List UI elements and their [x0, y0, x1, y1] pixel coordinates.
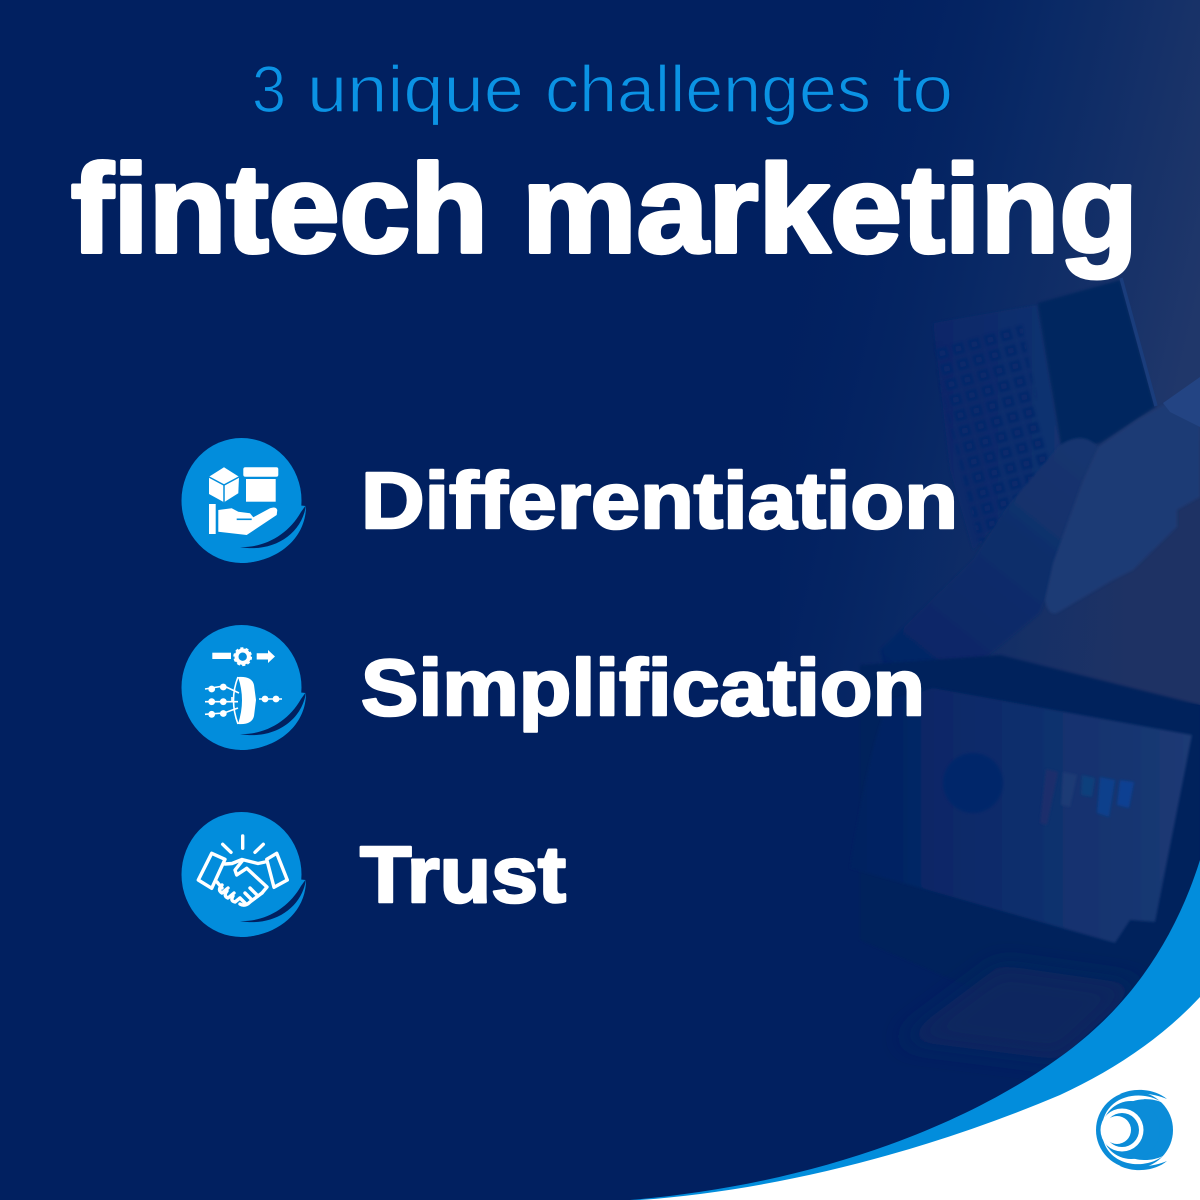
item: Differentiation — [182, 438, 958, 563]
title line: 3 unique challenges to: challenges — [545, 52, 871, 126]
heading: fintech marketing: fintech — [71, 140, 488, 279]
title line: 3 unique challenges to: to — [892, 52, 953, 126]
shirt cuff — [1163, 377, 1200, 427]
laptop base — [933, 305, 1062, 550]
handshake right hand — [1045, 383, 1200, 613]
heading: fintech marketing — [71, 140, 1138, 279]
logo — [1096, 1090, 1173, 1170]
handshake left arm — [880, 438, 1098, 700]
background photo: laptop, handshake and report — [780, 0, 1200, 1060]
item: Trust — [182, 812, 566, 937]
report bars — [1040, 769, 1134, 825]
laptop screen — [1038, 280, 1155, 450]
report paper — [850, 688, 1192, 943]
heading: fintech marketing: marketing — [522, 140, 1138, 279]
blue curve — [630, 860, 1200, 1200]
white corner — [640, 997, 1200, 1200]
label: Differentiation: Differentiation — [361, 456, 958, 545]
icon: process gear and filter wheel — [182, 625, 306, 750]
title line: 3 unique challenges to: 3 — [252, 52, 286, 126]
report pie — [943, 753, 1003, 813]
label: Trust: Trust — [360, 830, 566, 919]
title line: 3 unique challenges to: unique — [307, 52, 524, 126]
icon: open hand holding boxes — [182, 438, 306, 563]
title line: 3 unique challenges to — [252, 52, 953, 126]
laptop keyboard — [930, 325, 1050, 545]
corner swoosh — [630, 860, 1200, 1200]
item: Simplification — [182, 625, 925, 750]
icon: handshake — [182, 812, 306, 937]
table band — [860, 655, 1200, 1000]
label: Simplification: Simplification — [361, 643, 925, 732]
